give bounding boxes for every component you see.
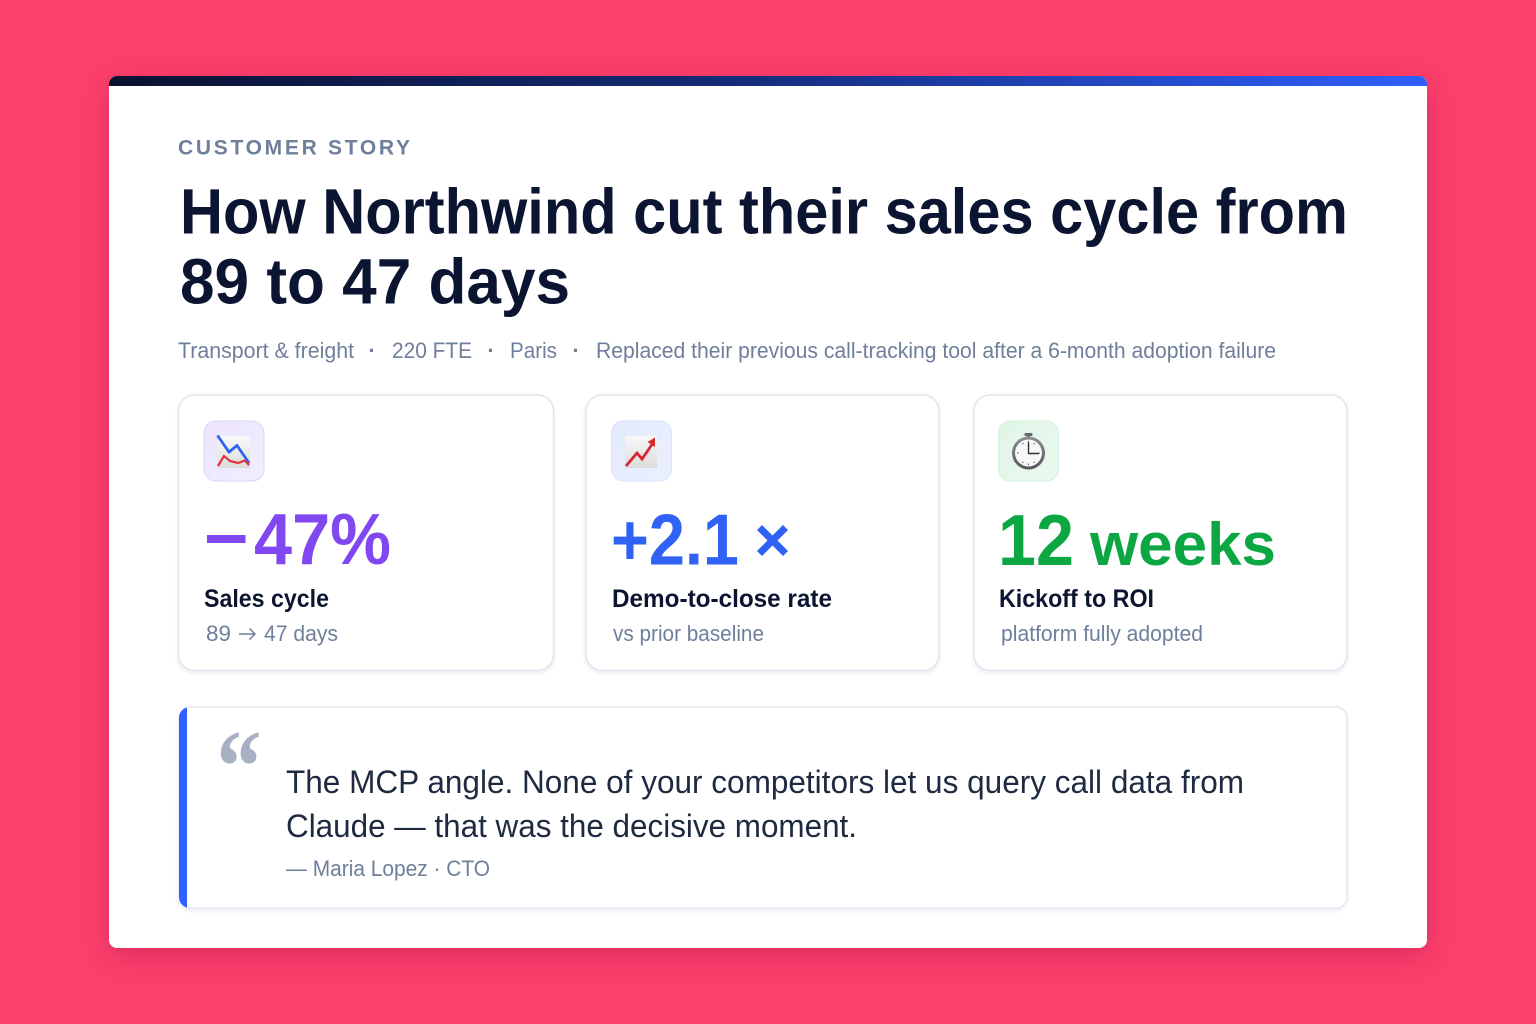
metadata line: · xyxy=(487,338,495,363)
top gradient bar xyxy=(109,76,1427,86)
metadata line: Replaced their previous call-tracking tool after a 6-month adoption failure xyxy=(596,338,1276,363)
quote panel xyxy=(179,707,1347,908)
quote text: Claude — that was the decisive moment. xyxy=(286,808,857,844)
title xyxy=(180,176,1348,318)
title: How Northwind cut their sales cycle from xyxy=(180,176,1348,248)
metric card: sales cycle xyxy=(178,395,554,670)
metadata line: Transport & freight xyxy=(178,338,354,363)
label: Demo-to-close rate xyxy=(612,585,832,613)
value: 12 weeks: 12 xyxy=(998,501,1074,581)
metadata line: 220 FTE xyxy=(392,338,472,363)
title: 89 to 47 days xyxy=(180,246,570,318)
metadata line: · xyxy=(572,338,580,363)
quote text xyxy=(286,764,1244,844)
eyebrow: CUSTOMER STORY xyxy=(178,136,410,160)
icon: stopwatch xyxy=(998,421,1058,481)
detail xyxy=(206,621,338,646)
metric card: kickoff to ROI xyxy=(974,395,1347,670)
metric card: demo-to-close rate xyxy=(586,395,939,670)
value: minus 47 percent: 47% xyxy=(254,500,391,580)
metadata line xyxy=(178,338,1276,363)
arrow xyxy=(239,628,255,640)
metadata line: Paris xyxy=(510,338,557,363)
quote accent bar xyxy=(179,707,187,908)
value: 12 weeks xyxy=(998,501,1276,581)
value: plus 2.1 times: +2.1 xyxy=(611,500,739,580)
quote text: The MCP angle. None of your competitors let us query call data from xyxy=(286,764,1244,800)
metadata line: · xyxy=(368,338,376,363)
detail: vs prior baseline xyxy=(613,621,764,646)
detail: platform fully adopted xyxy=(1001,621,1203,646)
main card xyxy=(109,76,1427,948)
value: 12 weeks: weeks xyxy=(1089,511,1276,578)
icon: falling chart xyxy=(204,421,264,481)
label: Sales cycle xyxy=(204,585,329,613)
detail: 89 xyxy=(206,621,231,646)
label: Kickoff to ROI xyxy=(999,585,1154,613)
quote mark: “ xyxy=(216,709,262,824)
attribution: — Maria Lopez · CTO xyxy=(286,856,490,881)
icon: rising chart xyxy=(612,421,672,481)
detail: 47 days xyxy=(264,621,338,646)
